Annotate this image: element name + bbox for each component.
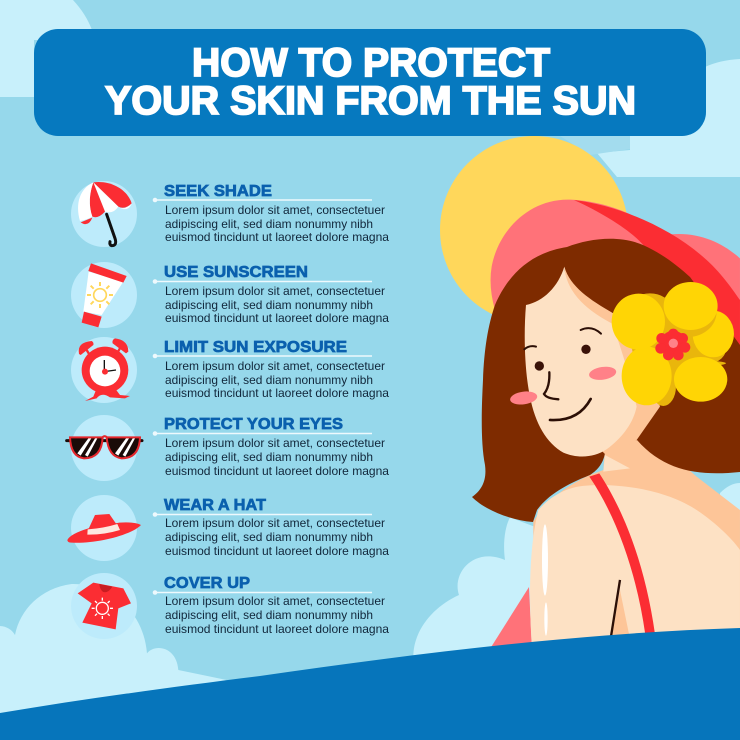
highlights: [542, 524, 548, 596]
text: use sunscreen: Lorem ipsum dolor sit amet, consectetuer: [165, 284, 385, 298]
hair: [472, 239, 740, 522]
back and shoulder: [530, 430, 740, 645]
item: limit sun exposure: [71, 337, 389, 403]
text: wear a hat: adipiscing elit, sed diam nonummy nibh: [165, 530, 373, 544]
heading: limit sun exposure: LIMIT SUN EXPOSURE: [164, 339, 347, 356]
hat: [491, 200, 740, 363]
text: seek shade: euismod tincidunt ut laoreet dolore magna: [165, 230, 389, 244]
title: HOW TO PROTECT: [192, 41, 550, 85]
text: seek shade: adipiscing elit, sed diam nonummy nibh: [165, 217, 373, 231]
sun: [440, 136, 628, 324]
text: cover up: adipiscing elit, sed diam nonummy nibh: [165, 608, 373, 622]
mouth: [550, 399, 591, 420]
text: wear a hat: [165, 516, 389, 558]
eyebrows: [524, 328, 601, 349]
text: protect your eyes: adipiscing elit, sed diam nonummy nibh: [165, 450, 373, 464]
item: use sunscreen: [71, 262, 389, 328]
icon: umbrella: [71, 181, 137, 247]
cloud: bottom left: [0, 584, 227, 720]
flower: [612, 282, 734, 406]
dress: [488, 587, 532, 652]
text: wear a hat: Lorem ipsum dolor sit amet, consectetuer: [165, 516, 385, 530]
eyes: [535, 361, 544, 371]
item: protect your eyes: [67, 415, 389, 481]
title banner: [34, 29, 706, 136]
item: cover up: [71, 573, 389, 639]
text: limit sun exposure: Lorem ipsum dolor sit amet, consectetuer: [165, 359, 385, 373]
heading: use sunscreen: USE SUNSCREEN: [164, 264, 308, 281]
text: use sunscreen: adipiscing elit, sed diam nonummy nibh: [165, 298, 373, 312]
text: seek shade: [165, 203, 389, 244]
text: protect your eyes: Lorem ipsum dolor sit amet, consectetuer: [165, 436, 385, 450]
cloud shadow under banner: [560, 136, 630, 155]
text: limit sun exposure: [165, 359, 389, 400]
nose: [544, 372, 558, 399]
item: wear a hat: [67, 495, 389, 561]
cloud: top right: [597, 59, 740, 177]
swimsuit strap: [589, 473, 655, 635]
icon: sunglasses: [67, 415, 142, 481]
icon: t-shirt: [71, 573, 137, 639]
text: use sunscreen: [165, 284, 389, 325]
icon: hat: [67, 495, 141, 561]
text: seek shade: Lorem ipsum dolor sit amet, consectetuer: [165, 203, 385, 217]
text: use sunscreen: euismod tincidunt ut laoreet dolore magna: [165, 311, 389, 325]
cheeks: [588, 365, 617, 381]
item: seek shade: [71, 181, 389, 247]
cloud: right of shoulder: [720, 483, 740, 520]
text: limit sun exposure: euismod tincidunt ut laoreet dolore magna: [165, 386, 389, 400]
icon: alarm clock: [71, 337, 137, 403]
text: wear a hat: euismod tincidunt ut laoreet dolore magna: [165, 544, 389, 558]
cloud: top left: [0, 0, 92, 97]
text: cover up: euismod tincidunt ut laoreet dolore magna: [165, 622, 389, 636]
text: limit sun exposure: adipiscing elit, sed diam nonummy nibh: [165, 373, 373, 387]
text: protect your eyes: euismod tincidunt ut laoreet dolore magna: [165, 464, 389, 478]
heading: protect your eyes: PROTECT YOUR EYES: [164, 416, 343, 433]
title: [105, 41, 636, 123]
face: [509, 267, 660, 457]
title: YOUR SKIN FROM THE SUN: [105, 79, 636, 123]
icon: sunscreen tube: [71, 262, 137, 328]
heading: wear a hat: WEAR A HAT: [164, 497, 266, 514]
woman illustration: [472, 200, 740, 652]
flower centre: [655, 329, 690, 360]
text: cover up: [165, 594, 389, 636]
text: protect your eyes: [165, 436, 389, 478]
heading: cover up: COVER UP: [164, 575, 250, 592]
cloud: bottom centre: [413, 517, 550, 657]
arm crease: [612, 590, 629, 636]
blue ground: [0, 628, 740, 740]
text: cover up: Lorem ipsum dolor sit amet, consectetuer: [165, 594, 385, 608]
heading: seek shade: SEEK SHADE: [164, 183, 272, 200]
